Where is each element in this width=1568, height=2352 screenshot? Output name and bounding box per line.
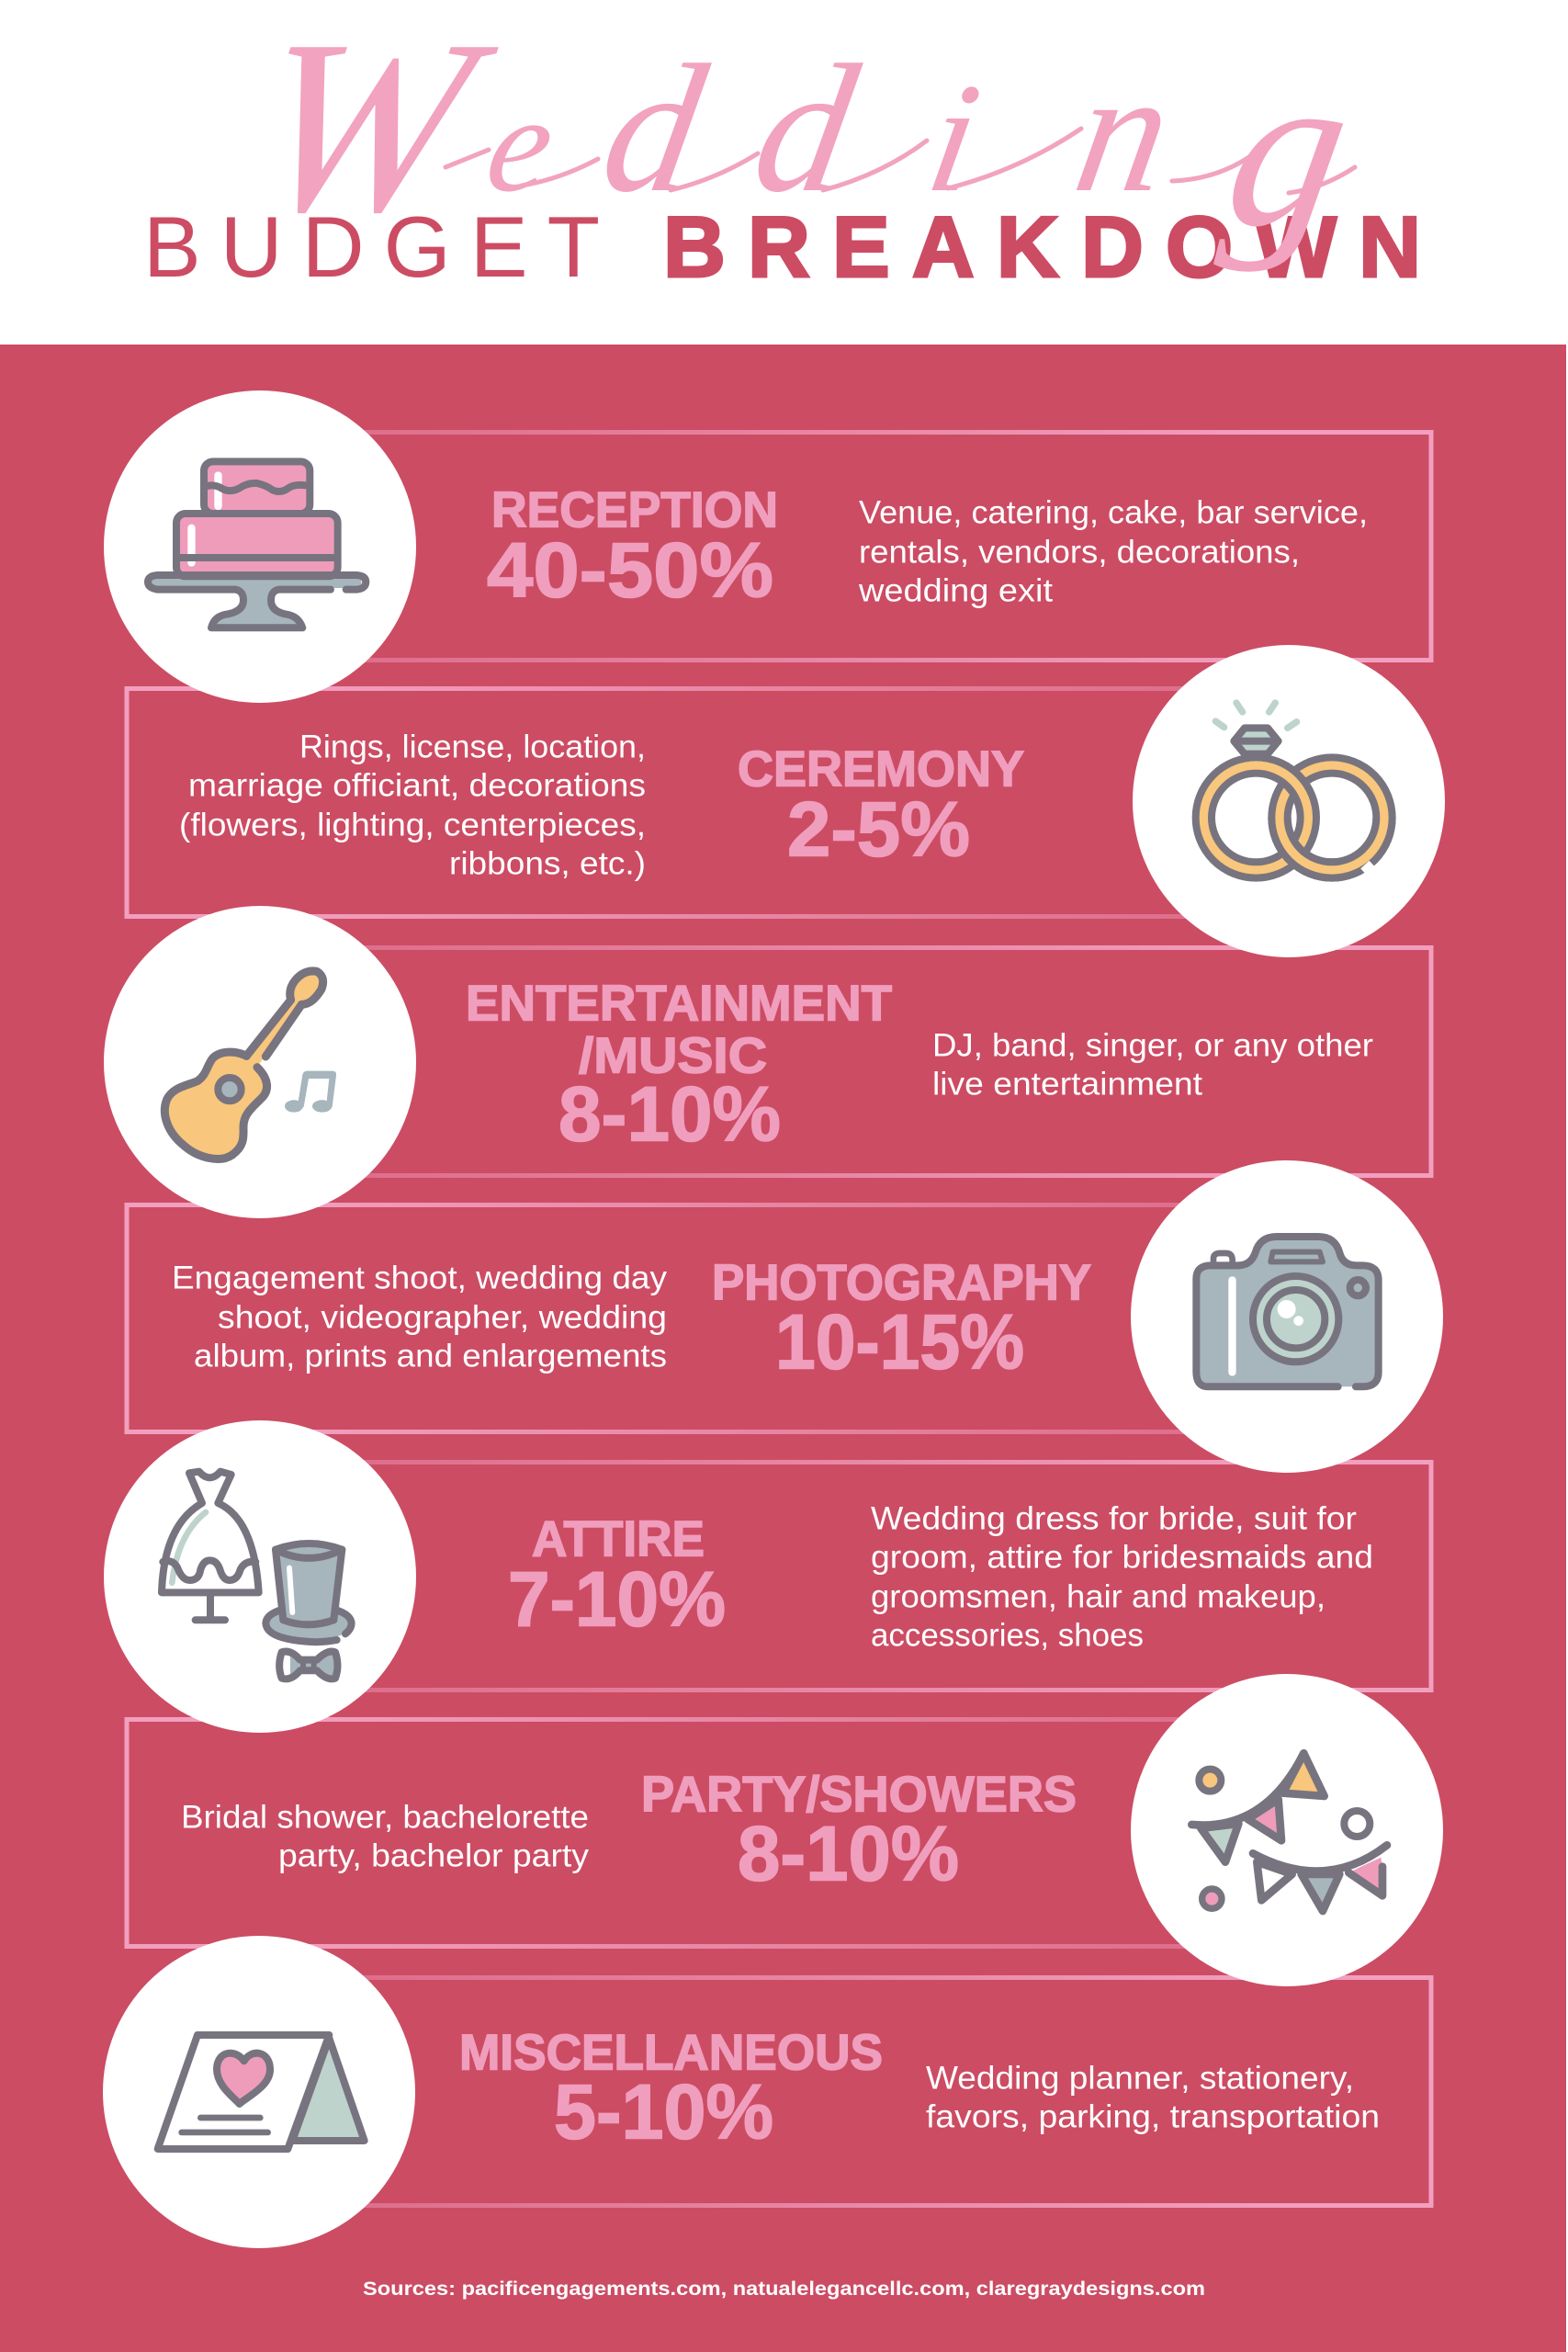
panel: entertainment text	[466, 974, 1373, 1158]
panel: attire text: 7-10%	[508, 1556, 726, 1643]
panel: attire text: Wedding dress for bride, suit for	[871, 1501, 1357, 1536]
panel: ceremony text: (flowers, lighting, centerpieces,	[179, 807, 646, 843]
panel: entertainment text: 8-10%	[558, 1071, 781, 1158]
panel: photography text: PHOTOGRAPHY	[712, 1253, 1091, 1310]
icon: party bunting	[1131, 1674, 1443, 1986]
panel: party/showers text: PARTY/SHOWERS	[641, 1766, 1077, 1823]
panel: party/showers text: party, bachelor party	[278, 1838, 590, 1874]
panel: photography text: shoot, videographer, wedding	[218, 1299, 667, 1336]
icon: camera	[1131, 1160, 1443, 1473]
panel: entertainment text: DJ, band, singer, or any other	[932, 1027, 1373, 1064]
title: wedding: d	[741, 26, 871, 231]
panel: reception text: rentals, vendors, decorations,	[859, 535, 1300, 570]
title: wedding: g	[1212, 26, 1367, 273]
subtitle: budget breakdown: BUDGET	[143, 198, 600, 295]
panel: reception text: wedding exit	[858, 573, 1053, 608]
panel: attire text: groom, attire for bridesmaids and	[871, 1540, 1373, 1575]
icon: wedding rings	[1133, 645, 1445, 957]
panel: attire text: groomsmen, hair and makeup,	[871, 1578, 1325, 1615]
panel: photography text: Engagement shoot, wedding day	[172, 1261, 668, 1295]
panel: party/showers text	[181, 1766, 1077, 1896]
panel: miscellaneous text: Wedding planner, stationery,	[926, 2060, 1354, 2097]
panel: reception text	[487, 481, 1368, 614]
panel: ceremony text	[179, 729, 1024, 882]
panel: reception text: Venue, catering, cake, bar service,	[859, 494, 1368, 531]
panel: photography text: 10-15%	[775, 1299, 1024, 1385]
panel: miscellaneous text: 5-10%	[554, 2069, 773, 2155]
panel: attire text	[508, 1501, 1373, 1654]
sources: Sources: pacificengagements.com, natualelegancellc.com, claregraydesigns.com	[363, 2278, 1205, 2300]
subtitle: budget breakdown	[143, 198, 1421, 295]
panel: miscellaneous text: MISCELLANEOUS	[459, 2023, 883, 2080]
panel: reception text: RECEPTION	[491, 481, 778, 538]
panel: photography text: album, prints and enlargements	[194, 1338, 667, 1374]
title: wedding: d	[590, 26, 719, 231]
panel: attire text: ATTIRE	[532, 1510, 705, 1567]
panel: entertainment text: live entertainment	[932, 1066, 1202, 1102]
title: wedding	[233, 0, 1373, 273]
subtitle: budget breakdown: BREAKDOWN	[663, 198, 1421, 295]
panel: ceremony text: Rings, license, location,	[299, 729, 646, 764]
frames: category boxes	[127, 432, 1431, 2205]
panel: photography text	[172, 1253, 1091, 1385]
icon: guitar and music note	[104, 906, 416, 1218]
panel: ceremony text: 2-5%	[787, 786, 970, 873]
panel: ceremony text: marriage officiant, decorations	[188, 768, 646, 803]
icon: invitation card	[103, 1936, 415, 2248]
icon: dress and top hat	[104, 1420, 416, 1733]
panel: party/showers text: 8-10%	[738, 1810, 959, 1896]
panel: attire text: accessories, shoes	[871, 1617, 1144, 1654]
icon: wedding cake	[104, 390, 416, 703]
panel: entertainment text: /MUSIC	[579, 1027, 767, 1084]
panel: party/showers text: Bridal shower, bachelorette	[181, 1799, 589, 1836]
panel: ceremony text: ribbons, etc.)	[449, 845, 646, 882]
panel: miscellaneous text	[459, 2023, 1380, 2155]
panel: ceremony text: CEREMONY	[738, 741, 1024, 797]
title: wedding: i	[917, 51, 991, 225]
panel: miscellaneous text: favors, parking, transportation	[926, 2098, 1380, 2135]
title: wedding: n	[1064, 35, 1185, 229]
title: wedding: e	[477, 67, 565, 220]
panel: reception text: 40-50%	[487, 527, 773, 614]
panel: entertainment text: ENTERTAINMENT	[466, 974, 892, 1031]
